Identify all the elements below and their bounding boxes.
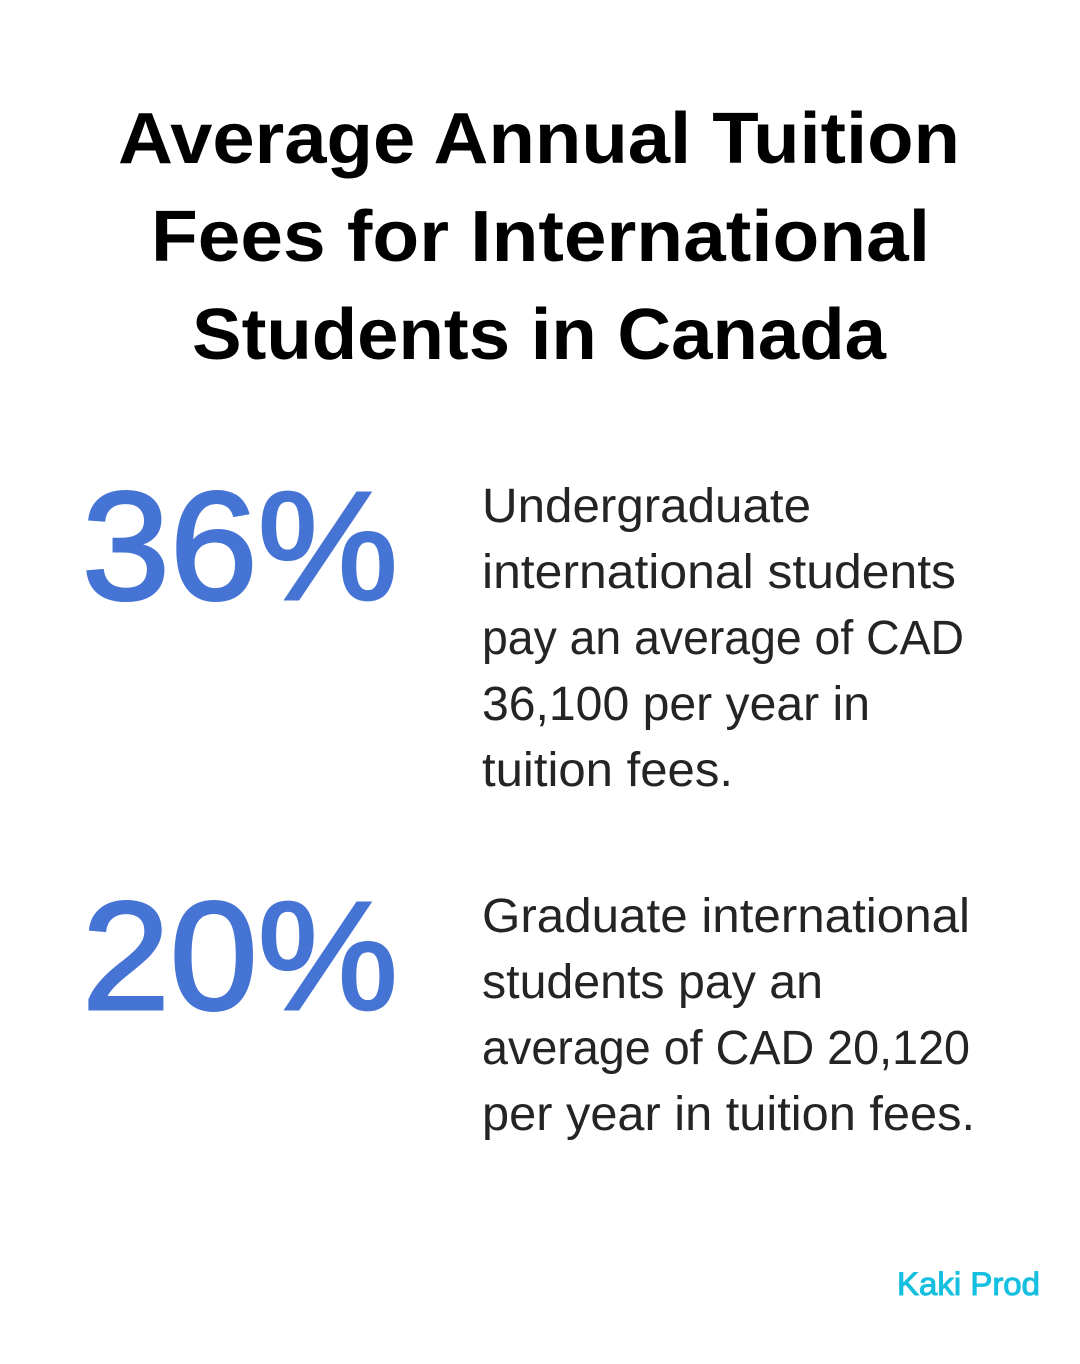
statistic: 36%: 36%	[82, 460, 398, 632]
title: Fees for International	[151, 197, 930, 277]
title	[118, 99, 960, 375]
text block: graduate fees	[482, 890, 975, 1141]
text block: graduate fees: average of CAD 20,120	[482, 1022, 970, 1075]
text block: undergraduate fees: 36,100 per year in	[482, 678, 870, 731]
title: Students in Canada	[192, 295, 887, 375]
text block: graduate fees: students pay an	[482, 956, 823, 1009]
text block: undergraduate fees: international students	[482, 546, 956, 599]
text block: graduate fees: Graduate international	[482, 890, 970, 943]
statistic: 20%: 20%	[82, 870, 398, 1042]
logo: Kaki Prod: Kaki Prod	[897, 1266, 1040, 1302]
text block: graduate fees: per year in tuition fees.	[482, 1088, 975, 1141]
text block: undergraduate fees: tuition fees.	[482, 744, 733, 797]
title: Average Annual Tuition	[118, 99, 960, 179]
text block: undergraduate fees: pay an average of CAD	[482, 612, 964, 665]
text block: undergraduate fees	[482, 480, 964, 797]
text block: undergraduate fees: Undergraduate	[482, 480, 811, 533]
